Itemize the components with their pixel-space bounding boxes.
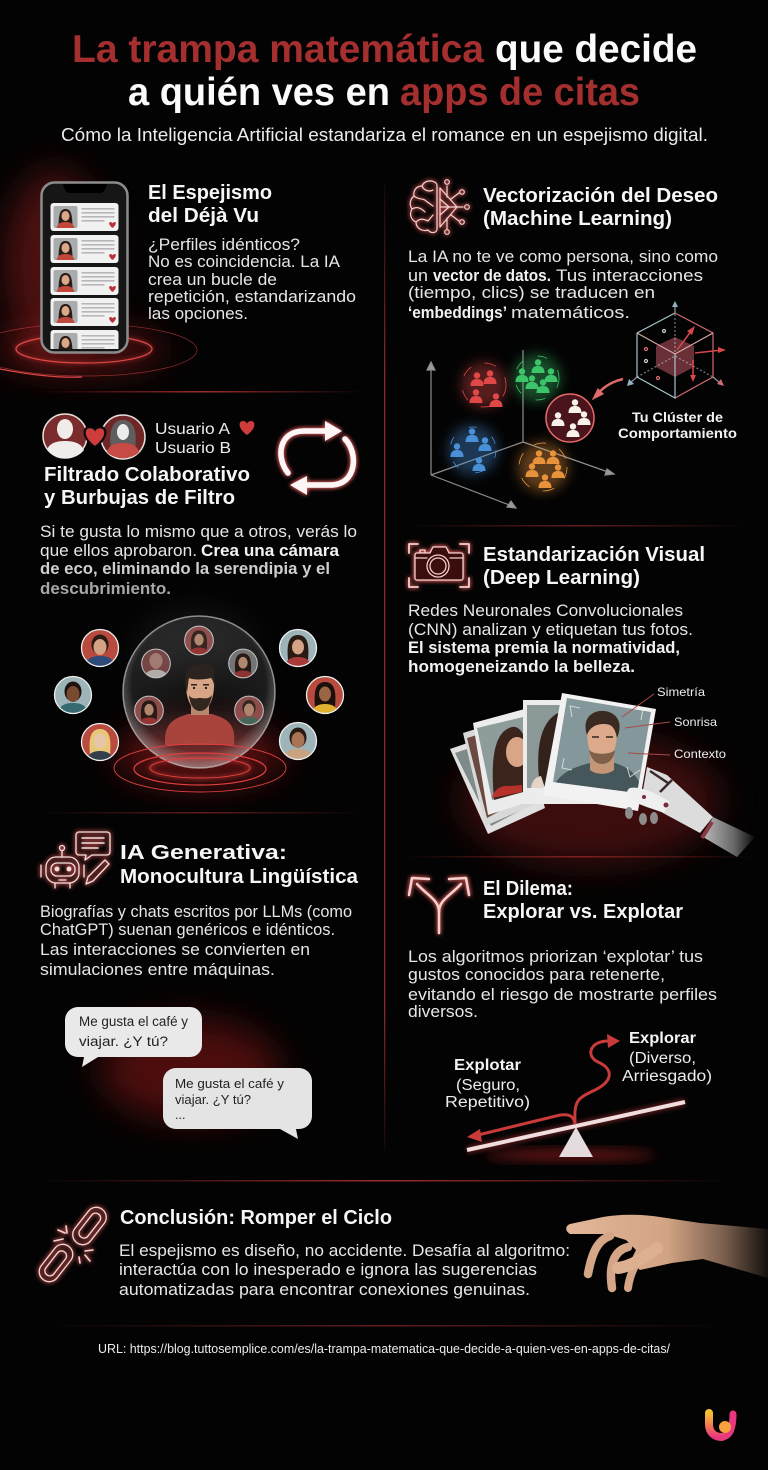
chat bubble right: ... xyxy=(175,1108,185,1122)
panel: conclusion xyxy=(35,1203,768,1299)
seesaw xyxy=(467,1102,685,1157)
text: vector de datos: un xyxy=(408,267,428,285)
avatars outside bubble xyxy=(54,630,344,762)
logo xyxy=(709,1413,733,1437)
text: biografias xyxy=(40,903,352,979)
label: explorar: Explorar xyxy=(629,1030,696,1047)
robot hand xyxy=(625,767,755,857)
text: redes neuronales: (CNN) analizan y etiquetan tus fotos. xyxy=(408,621,693,639)
icon: broken chain xyxy=(35,1203,110,1286)
text: vector de datos: Tus interacciones xyxy=(556,267,703,285)
callout lines xyxy=(622,694,670,755)
illustration: identical chat bubbles xyxy=(65,1007,312,1139)
text: vector de datos: La IA no te ve como persona, sino como xyxy=(408,248,718,266)
text: conclusion body: El espejismo es diseño, no accidente. Desafía al algoritmo: xyxy=(119,1242,570,1260)
text: vector de datos: ‘embeddings’ xyxy=(408,304,507,322)
heading: ia generativa: Monocultura Lingüística xyxy=(120,865,359,888)
panel: espejismo del deja vu xyxy=(0,170,356,377)
heading: ia generativa: IA Generativa: xyxy=(120,841,287,864)
text: algoritmos: diversos. xyxy=(408,1003,478,1021)
heading: el dilema: El Dilema: xyxy=(483,877,573,900)
title xyxy=(72,28,697,114)
illustration: scanned photos and robot hand xyxy=(450,685,755,865)
panel: el dilema xyxy=(408,877,717,1160)
chat bubble right: viajar. ¿Y tú? xyxy=(175,1093,251,1107)
your cluster xyxy=(546,394,594,442)
illustration: seesaw balance xyxy=(445,1030,712,1160)
label: tu cluster xyxy=(618,409,737,441)
chat bubble left xyxy=(65,1007,202,1067)
panel: estandarizacion visual xyxy=(408,543,755,865)
cluster blue xyxy=(448,425,498,475)
callout labels: Contexto xyxy=(674,747,726,761)
central person xyxy=(165,664,234,745)
label: tu cluster: Tu Clúster de xyxy=(632,409,723,425)
text: camara de eco: descubrimiento. xyxy=(40,580,171,598)
callout labels: Simetría xyxy=(657,685,705,699)
text: camara de eco: que ellos aprobaron. xyxy=(40,542,197,560)
icon: brain with circuits xyxy=(410,180,469,234)
panel: ia generativa xyxy=(40,832,359,1139)
text: camara de eco xyxy=(40,523,357,598)
label: explorar: Arriesgado) xyxy=(622,1068,712,1085)
label: explorar: (Diverso, xyxy=(629,1050,696,1067)
heading: filtrado colaborativo xyxy=(44,463,250,509)
heading: vectorizacion xyxy=(483,184,718,230)
label: explotar xyxy=(445,1057,530,1111)
callout labels: Sonrisa xyxy=(674,715,717,729)
text: redes neuronales xyxy=(408,602,693,676)
heading: el espejismo xyxy=(148,181,272,227)
heading: filtrado colaborativo: y Burbujas de Filtro xyxy=(44,486,235,509)
text: biografias: Biografías y chats escritos por LLMs (como xyxy=(40,903,352,921)
text: vector de datos: vector de datos. xyxy=(433,267,551,285)
text: perfiles identicos xyxy=(148,236,356,323)
heading: el dilema: Explorar vs. Explotar xyxy=(483,900,683,923)
text: vector de datos xyxy=(408,248,718,322)
heading: filtrado colaborativo: Filtrado Colaborativo xyxy=(44,463,250,486)
cluster green xyxy=(513,354,561,402)
chat bubble right xyxy=(163,1068,312,1139)
label: explotar: Repetitivo) xyxy=(445,1094,530,1111)
label: tu cluster: Comportamiento xyxy=(618,425,737,441)
text: usuario a and b: Usuario A xyxy=(155,421,230,438)
axes xyxy=(427,350,614,508)
chart: 3d embedding space xyxy=(427,301,737,508)
text: algoritmos: evitando el riesgo de mostrarte perfiles xyxy=(408,986,717,1004)
heading: el espejismo: El Espejismo xyxy=(148,181,272,204)
source url: URL: https://blog.tuttosemplice.com/es/la-trampa-matematica-que-decide-a-quien-ves-en-apps-de-citas/ xyxy=(98,1342,671,1356)
cluster red xyxy=(461,362,507,408)
heading: el espejismo: del Déjà Vu xyxy=(148,204,259,227)
text: biografias: Las interacciones se convierten en xyxy=(40,941,310,959)
text: camara de eco: Si te gusta lo mismo que a otros, verás lo xyxy=(40,523,357,541)
heading: estandarizacion: Estandarización Visual xyxy=(483,543,705,566)
text: perfiles identicos: ¿Perfiles idénticos? xyxy=(148,236,300,254)
heading: vectorizacion: Vectorización del Deseo xyxy=(483,184,718,207)
text: perfiles identicos: crea un bucle de xyxy=(148,271,277,289)
icon: camera with frame xyxy=(409,544,469,587)
text: camara de eco: Crea una cámara xyxy=(201,542,340,560)
text: usuario a and b: Usuario B xyxy=(155,440,231,457)
text: algoritmos xyxy=(408,948,717,1021)
illustration: reaching hand xyxy=(566,1215,768,1288)
cluster orange xyxy=(518,442,568,492)
panel: vectorizacion del deseo xyxy=(408,180,737,508)
label: explotar: Explotar xyxy=(454,1057,521,1074)
panel: filtrado colaborativo xyxy=(40,414,357,792)
icon: forked arrow xyxy=(409,878,469,933)
avatars inside bubble xyxy=(135,626,263,726)
text: conclusion body: interactúa con lo inesperado e ignora las sugerencias xyxy=(119,1261,537,1279)
icon: robot with chat and pencil xyxy=(41,832,110,888)
text: vector de datos: (tiempo, clics) se traducen en xyxy=(408,284,655,302)
label: explotar: (Seguro, xyxy=(456,1077,520,1094)
main polaroid with face xyxy=(543,693,656,811)
heading: ia generativa xyxy=(120,841,359,888)
heading: estandarizacion: (Deep Learning) xyxy=(483,566,640,589)
text: redes neuronales: El sistema premia la normatividad, xyxy=(408,639,680,657)
text: redes neuronales: homogeneizando la belleza. xyxy=(408,658,635,676)
heading: estandarizacion xyxy=(483,543,705,589)
glow platform rings xyxy=(114,744,286,792)
callout labels xyxy=(657,685,726,761)
icon: repeat loop xyxy=(281,421,353,495)
text: perfiles identicos: No es coincidencia. La IA xyxy=(148,253,340,271)
text: conclusion body xyxy=(119,1242,570,1299)
text: perfiles identicos: repetición, estandarizando xyxy=(148,288,356,306)
text: conclusion body: automatizadas para encontrar conexiones genuinas. xyxy=(119,1281,530,1299)
bubble xyxy=(123,616,275,768)
text: algoritmos: gustos conocidos para retenerte, xyxy=(408,966,665,984)
heading: vectorizacion: (Machine Learning) xyxy=(483,207,672,230)
text: vector de datos: matemáticos. xyxy=(511,304,630,322)
title: La trampa matemática xyxy=(72,28,484,71)
title: que decide xyxy=(495,28,697,71)
text: algoritmos: Los algoritmos priorizan ‘explotar’ tus xyxy=(408,948,703,966)
icon: phone with repeated profiles xyxy=(0,170,197,377)
heading: conclusion: Conclusión: Romper el Ciclo xyxy=(120,1206,392,1229)
red arrows xyxy=(467,1034,620,1142)
text: perfiles identicos: las opciones. xyxy=(148,305,248,323)
heading: el dilema xyxy=(483,877,683,923)
text: usuario a and b xyxy=(155,421,254,457)
title: a quién ves en xyxy=(128,71,390,114)
subtitle: Cómo la Inteligencia Artificial estandariza el romance en un espejismo digital. xyxy=(61,124,708,145)
chat bubble left: viajar. ¿Y tú? xyxy=(79,1034,168,1049)
chat bubble left: Me gusta el café y xyxy=(79,1014,188,1029)
text: redes neuronales: Redes Neuronales Convolucionales xyxy=(408,602,683,620)
chat bubble right: Me gusta el café y xyxy=(175,1077,285,1091)
back photos xyxy=(450,700,598,834)
cube with arrows xyxy=(593,301,726,399)
text: biografias: simulaciones entre máquinas. xyxy=(40,961,275,979)
title: apps de citas xyxy=(400,71,640,114)
icon: two users with heart xyxy=(43,414,145,459)
text: biografias: ChatGPT) suenan genéricos e idénticos. xyxy=(40,921,335,939)
illustration: filter bubble with avatars xyxy=(54,615,344,792)
text: camara de eco: de eco, eliminando la serendipia y el xyxy=(40,560,330,578)
label: explorar xyxy=(622,1030,712,1085)
